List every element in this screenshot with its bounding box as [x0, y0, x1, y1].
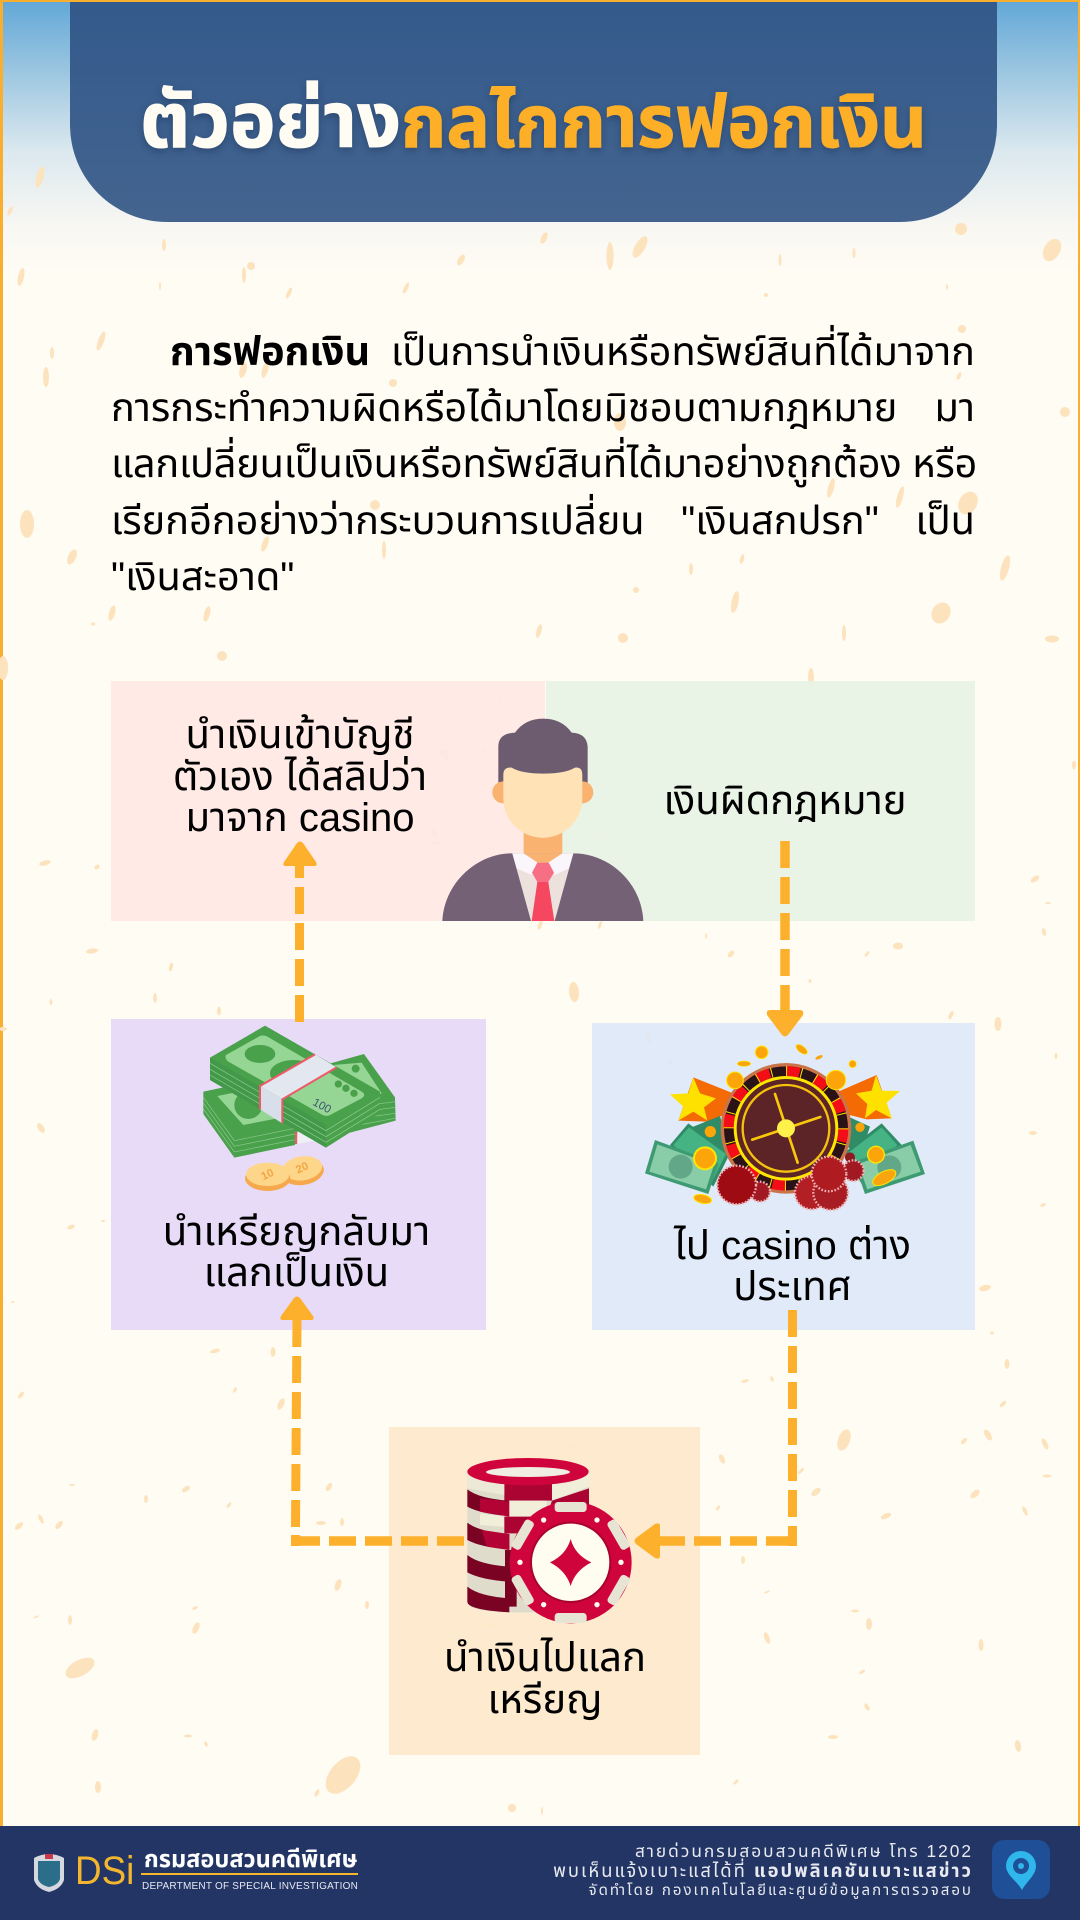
label: go to casino abroad [674, 1224, 911, 1309]
icon: stacks of banknotes: 100 [311, 1097, 333, 1116]
department name: กรมสอบสวนคดีพิเศษ [144, 1847, 358, 1873]
panel: exchange coins back to money [111, 1019, 486, 1330]
icon: DSI shield logo [34, 1854, 64, 1892]
intro text block: เรียกอีกอย่างว่ากระบวนการเปลี่ยน "เงินสกปรก" เป็น [111, 499, 975, 543]
intro text block: แลกเปลี่ยนเป็นเงินหรือทรัพย์สินที่ได้มาอย่างถูกต้อง หรือ [111, 442, 977, 486]
DSi wordmark: DSi [75, 1849, 134, 1893]
icon: app icon [992, 1840, 1050, 1899]
panel: exchange money for coins [389, 1427, 700, 1755]
intro text block: การกระทำความผิดหรือได้มาโดยมิชอบตามกฎหมาย มา [111, 386, 975, 430]
label: exchange coins back: นำเหรียญกลับมา [163, 1210, 430, 1254]
label: exchange for coins: นำเงินไปแลก [444, 1636, 646, 1680]
label: deposit to own account [173, 713, 427, 840]
label: exchange for coins [444, 1636, 646, 1722]
label: exchange coins back [163, 1210, 430, 1295]
divider line [141, 1873, 358, 1875]
intro text block [111, 324, 977, 599]
label: illegal money: เงินผิดกฎหมาย [664, 779, 906, 823]
arrow: chips left and up to exchange back [280, 1296, 464, 1546]
label: deposit to own account: มาจาก casino [185, 796, 415, 840]
panel: header banner [70, 2, 997, 222]
label: go to casino abroad: ประเทศ [733, 1265, 852, 1309]
intro text block: "เงินสะอาด" [111, 555, 294, 599]
icon: roulette casino [645, 1043, 925, 1210]
panel: footer [0, 1826, 1080, 1920]
arrow: casino down and left to chips [634, 1310, 793, 1559]
label: deposit to own account: นำเงินเข้าบัญชี [186, 713, 414, 757]
hotline text: จัดทำโดย กองเทคโนโลยีและศูนย์ข้อมูลการตรวจสอบ [589, 1882, 973, 1899]
hotline text: สายด่วนกรมสอบสวนคดีพิเศษ โทร 1202 [635, 1841, 973, 1861]
icon: stacks of banknotes: 20 [294, 1160, 311, 1176]
label: deposit to own account: ตัวเอง ได้สลิปว่า [173, 754, 427, 798]
department english name: DEPARTMENT OF SPECIAL INVESTIGATION [142, 1881, 358, 1892]
label: exchange for coins: เหรียญ [488, 1678, 602, 1722]
arrow: money up to deposit [283, 842, 317, 1022]
icon: casino chips [467, 1458, 632, 1623]
hotline text: พบเห็นแจ้งเบาะแสได้ที่ แอปพลิเคชันเบาะแสข่าว [553, 1860, 973, 1881]
hotline text [553, 1841, 973, 1899]
intro text block: การฟอกเงิน เป็นการนำเงินหรือทรัพย์สินที่ได้มาจาก [170, 330, 975, 374]
icon: stacks of banknotes: 10 [259, 1167, 276, 1183]
icon: stacks of banknotes [203, 1026, 396, 1191]
title: ตัวอย่างกลไกการฟอกเงิน [140, 78, 927, 164]
icon: businessman [442, 719, 643, 921]
panel: deposit to own account [111, 681, 545, 921]
panel: illegal money [546, 681, 975, 921]
panel: go to casino abroad [592, 1023, 975, 1330]
arrow: illegal money down to casino [767, 839, 803, 1036]
label: exchange coins back: แลกเป็นเงิน [204, 1251, 389, 1295]
label: go to casino abroad: ไป casino ต่าง [674, 1224, 911, 1268]
